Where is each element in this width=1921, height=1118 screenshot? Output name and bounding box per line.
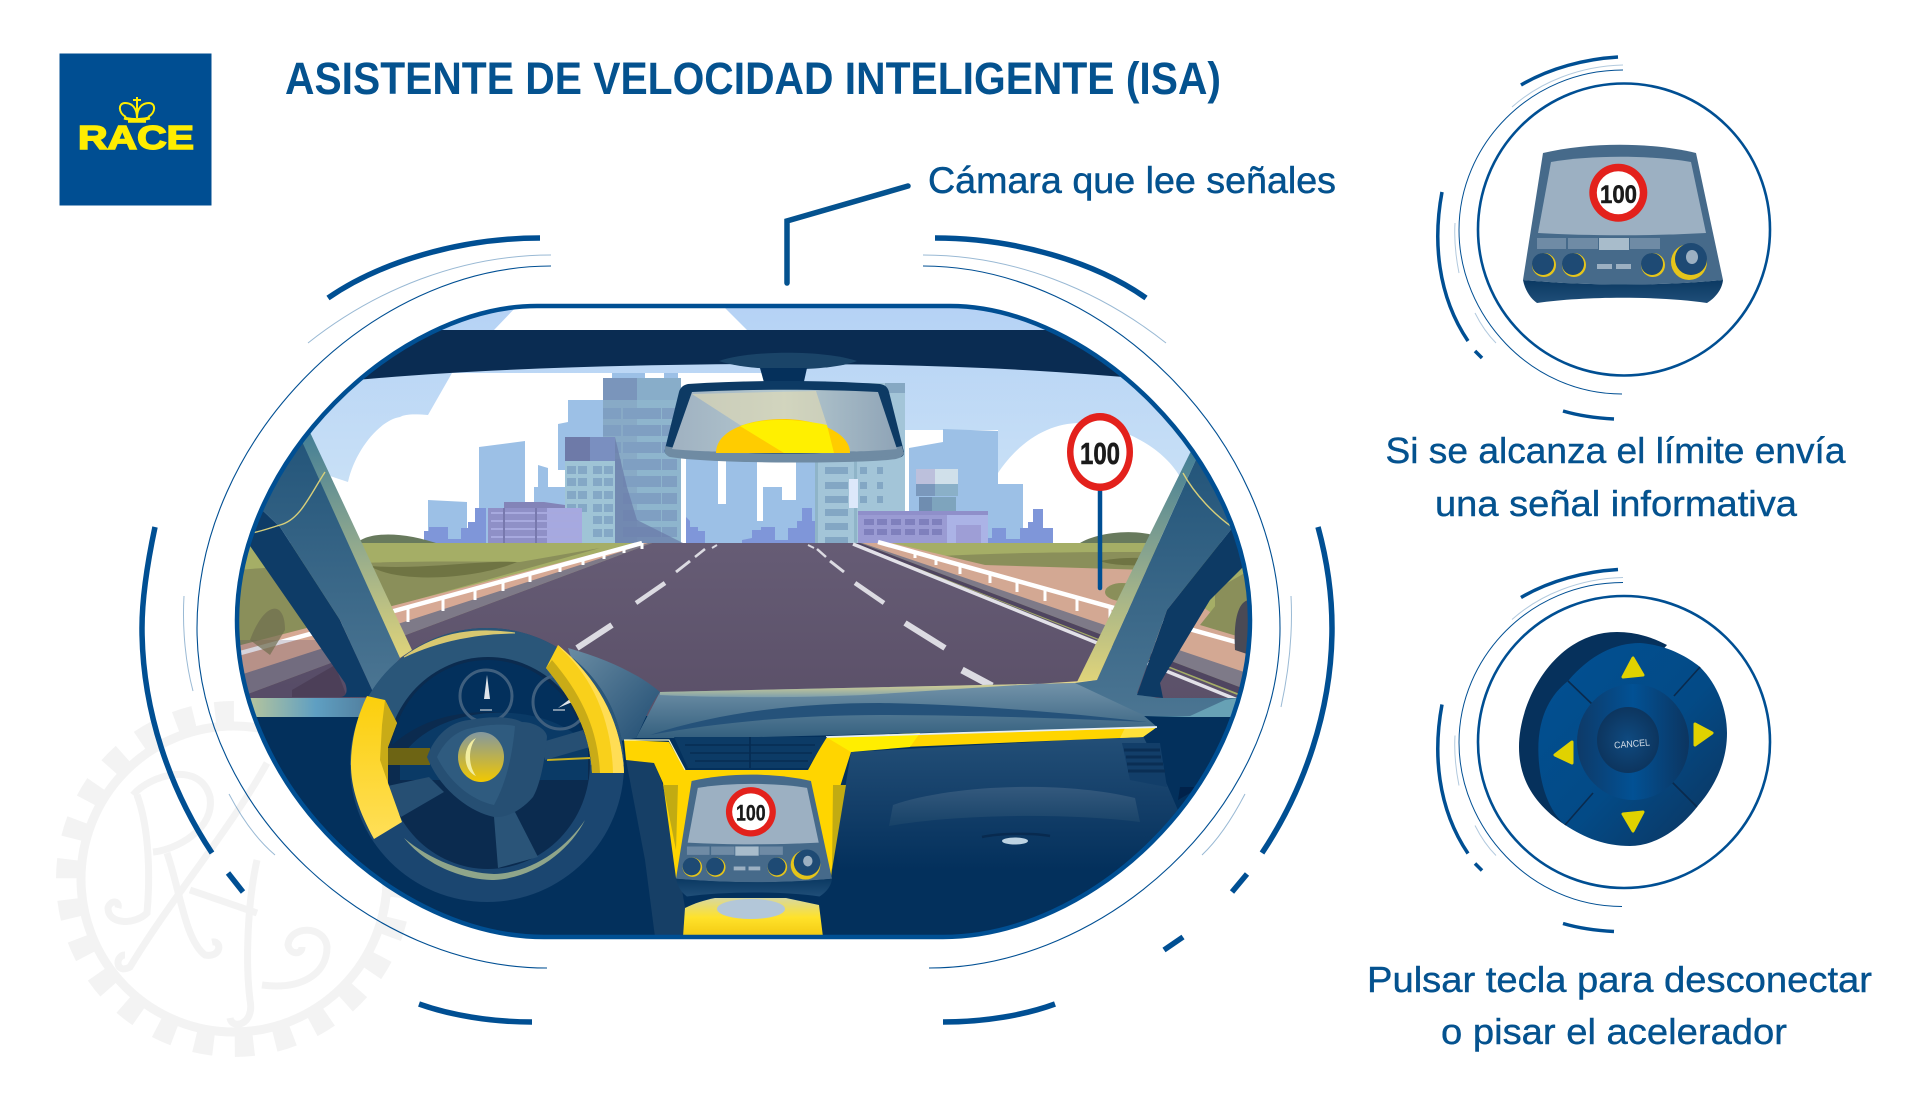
road sign: 100 limit: 100 [1080,436,1120,471]
city skyline [424,373,1053,543]
circle frame and arcs [1438,57,1770,419]
sky with clouds [237,306,1250,546]
panel: informative signal [1438,57,1770,419]
gauges [460,670,587,729]
text: informative signal: una señal informativa [1435,483,1798,524]
console monitor: 100 [736,800,766,825]
text: cancel instruction [1367,959,1872,1052]
yellow trim [624,727,1157,878]
icon: crown [120,97,154,122]
callout label: camera: Cámara que lee señales [928,160,1336,201]
hills and fields [239,532,1244,695]
rear-view mirror [665,353,904,463]
text: cancel instruction: o pisar el acelerador [1441,1011,1787,1052]
yellow wheel grips [546,645,624,773]
hub [427,717,547,817]
circle frame and arcs [1438,570,1770,932]
passenger lower dash [838,737,1178,838]
text: cancel instruction: Pulsar tecla para desconectar [1367,959,1872,1000]
logo: RACE: RACE [78,119,194,156]
roof band [346,330,1135,381]
icon: dial control [1519,632,1727,846]
text: informative signal [1386,430,1846,524]
dashboard [237,648,1250,937]
right A-pillar [1076,452,1248,716]
steering wheel [350,628,624,902]
spokes [388,748,430,765]
watermark: RACE gear monogram [67,712,401,1046]
panel: cancel button [1438,570,1770,932]
title: ASISTENTE DE VELOCIDAD INTELIGENTE (ISA) [285,53,1221,104]
icon: dial control: CANCEL [1614,737,1650,752]
left A-pillar [250,434,412,697]
console monitor [676,775,832,896]
text: informative signal: Si se alcanza el límite envía [1386,430,1846,471]
wheel highlights [404,631,515,657]
icon: console monitor [1523,145,1723,303]
center vents [674,737,827,768]
windshield outline [237,306,1250,937]
icon: console monitor: 100 [1600,181,1637,209]
road with shoulders and railings [240,540,1246,716]
console lower yellow tray [683,898,823,937]
arrow: camera callout line [787,186,908,283]
logo: RACE [60,54,212,206]
decorative rings around windshield [142,238,1332,1022]
panel: windshield view [230,306,1270,937]
road sign: 100 limit [1067,413,1133,588]
